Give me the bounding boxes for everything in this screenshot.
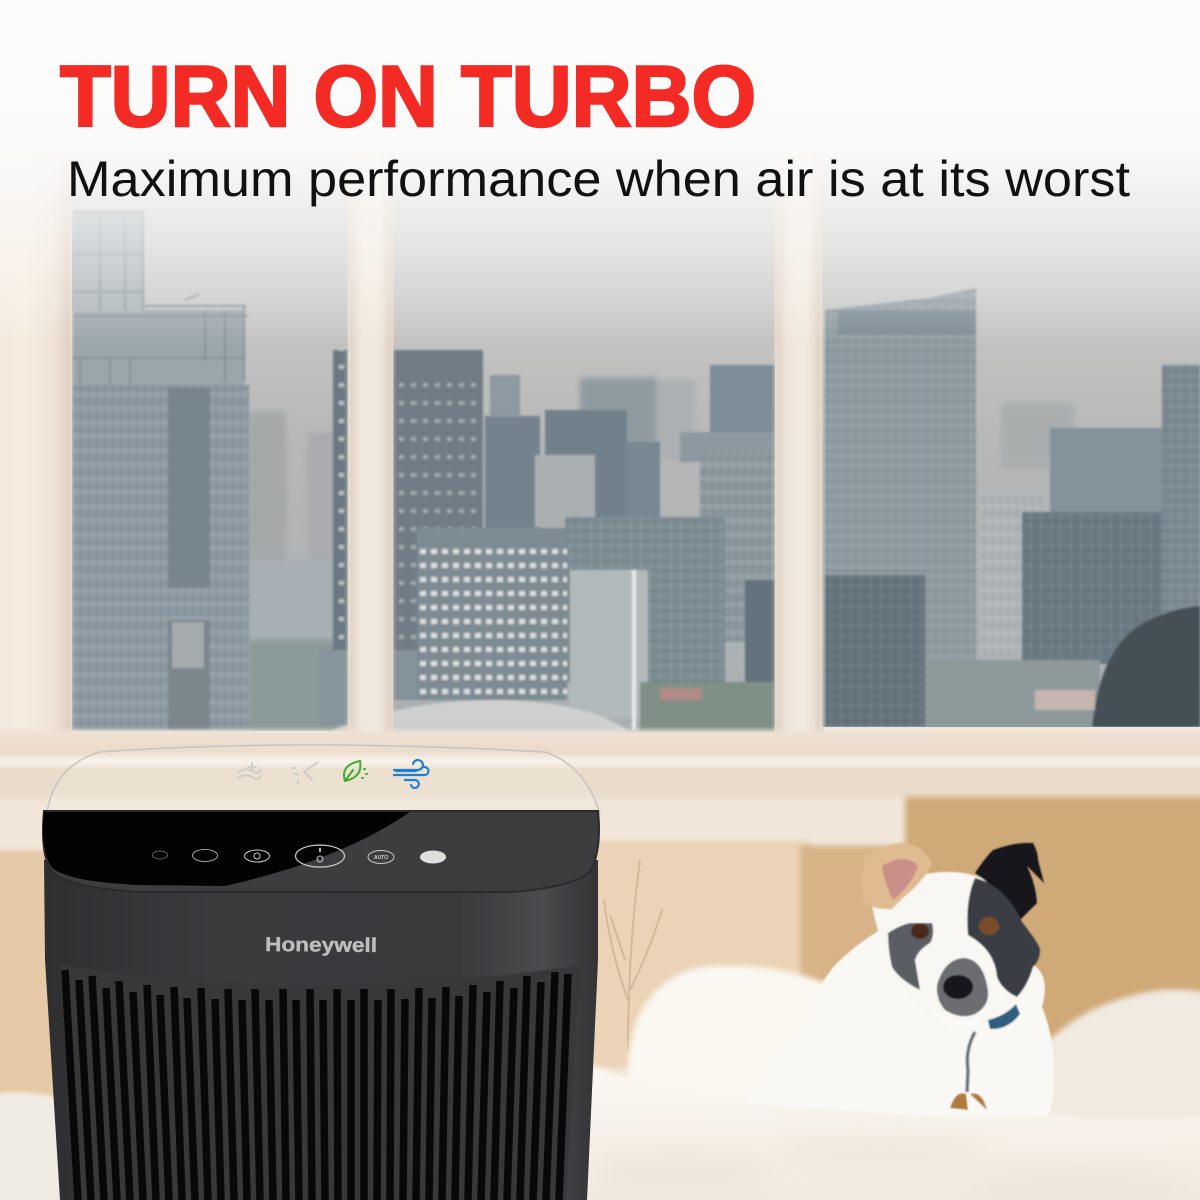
top haze fade (0, 0, 1200, 345)
dog head (872, 872, 1031, 1028)
grille (60, 965, 580, 1200)
panel glare (43, 812, 410, 886)
nose (943, 975, 973, 999)
collar (988, 1004, 1020, 1029)
right eye (979, 917, 999, 935)
control panel (43, 811, 599, 892)
front fur (575, 1065, 1200, 1200)
icon: blue wind (394, 760, 428, 788)
muzzle (937, 958, 988, 1016)
left tower (72, 212, 249, 731)
tag (950, 1093, 987, 1110)
title: TURN ON TURBO (60, 49, 756, 145)
left bed edge (0, 1092, 72, 1200)
icon: brush (292, 762, 318, 783)
clear top lid (47, 745, 600, 814)
bed right lobe (1050, 990, 1200, 1125)
icon: sparkle (238, 763, 261, 779)
icon: green leaf (344, 761, 367, 781)
left ear (862, 843, 932, 909)
tan headboard cushion (905, 797, 1200, 1040)
fur shading (590, 1138, 1190, 1199)
dog (745, 843, 1054, 1117)
dog body (745, 930, 1054, 1117)
left face patch (888, 923, 933, 990)
distant hazy buildings (248, 378, 1074, 735)
chain (967, 1032, 975, 1092)
dried plant (604, 860, 662, 1050)
bed left lobe (628, 965, 840, 1110)
right-pane buildings (825, 288, 1200, 730)
left eye (911, 923, 929, 939)
window frame (0, 150, 1200, 840)
brand name: Honeywell (265, 934, 377, 957)
panel buttons (152, 845, 394, 867)
right ear (975, 843, 1044, 920)
white chin (930, 1010, 992, 1028)
main body (44, 860, 598, 1200)
mid-pane buildings (320, 350, 775, 732)
window view: smoggy city skyline (60, 150, 1200, 740)
auto label: AUTO (374, 855, 388, 861)
subtitle: Maximum performance when air is at its worst (67, 151, 1130, 207)
mode icons (238, 760, 428, 788)
dog bed and fur blanket (0, 965, 1200, 1200)
turbo button (420, 850, 446, 864)
right face patch (967, 878, 1040, 997)
air purifier (43, 745, 600, 1200)
